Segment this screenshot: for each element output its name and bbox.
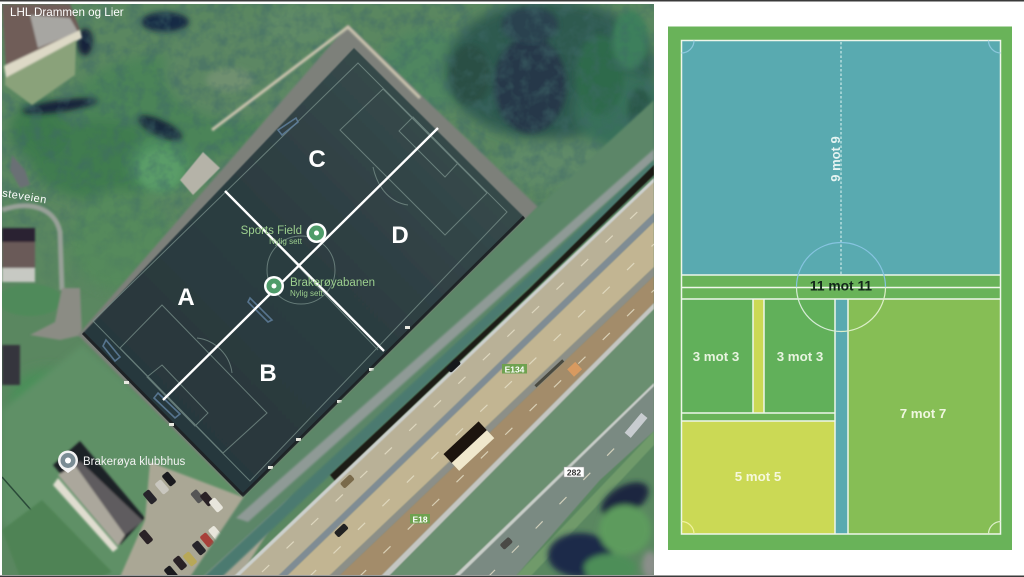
map pin: Sports Field: Nylig sett	[269, 237, 303, 246]
map pin: Brakerøyabanen: Brakerøyabanen	[290, 277, 375, 289]
zone letter B: B	[259, 360, 277, 387]
building top left	[2, 4, 82, 105]
zone: teal strip	[835, 299, 848, 534]
corner arcs	[682, 40, 1000, 534]
gravel surround of the pitch	[78, 25, 538, 498]
lane dashes	[262, 196, 654, 577]
map pin: Sports Field: Sports Field	[241, 225, 302, 237]
zone letter A: A	[177, 284, 195, 311]
label: 11 mot 11: 11 mot 11	[810, 278, 872, 294]
panel: pitch division diagram	[668, 26, 1012, 550]
motorway carriageways	[233, 178, 654, 577]
grass strip, path and hedge	[190, 100, 654, 577]
zone: 9 mot 9: 9 mot 9	[828, 136, 843, 182]
pitch markings	[682, 40, 1000, 534]
zone: 7 mot 7	[848, 299, 1001, 534]
road badge E134: E134	[505, 364, 525, 374]
zone: 9 mot 9	[682, 41, 1000, 275]
map pin: Brakerøya klubbhus: Brakerøya klubbhus	[83, 456, 186, 468]
centre circle	[796, 242, 886, 332]
tree canopy texture	[2, 4, 654, 240]
panel: satellite map of the field	[0, 0, 665, 577]
houses on left edge	[0, 155, 82, 385]
zone letter D: D	[391, 222, 409, 249]
white dividing line two	[225, 191, 384, 351]
zone: 7 mot 7: 7 mot 7	[900, 406, 946, 421]
zone letter C: C	[308, 146, 326, 173]
zones: left 3 mot 3: 3 mot 3	[693, 349, 739, 364]
trees lower right	[548, 475, 658, 577]
map pin: Sports Field	[241, 223, 326, 246]
map pin: Brakerøyabanen	[264, 276, 375, 298]
white dividing line one	[163, 128, 438, 400]
pitch background	[668, 26, 1012, 550]
zone: 5 mot 5	[682, 421, 835, 534]
road badge E18: E18	[412, 514, 428, 524]
map pin: Brakerøyabanen: Nylig sett	[290, 289, 324, 298]
zones: right 3 mot 3: 3 mot 3	[777, 349, 823, 364]
pitch markings	[93, 63, 507, 481]
zone: 5 mot 5: 5 mot 5	[735, 469, 782, 484]
road badge 282	[564, 467, 584, 478]
lawn below field	[5, 352, 234, 573]
pitch surface	[83, 48, 524, 495]
map label: steveien: steveien	[1, 187, 48, 206]
clubhouse and parking	[2, 441, 300, 577]
map label: LHL Drammen og Lier: LHL Drammen og Lier	[10, 6, 124, 19]
map pin: Brakerøya klubbhus	[58, 450, 186, 473]
goals	[103, 118, 298, 418]
vehicles	[334, 358, 647, 550]
trees and vegetation	[7, 4, 654, 399]
zones: left 3 mot 3	[682, 299, 753, 413]
road badge 282: 282	[567, 468, 581, 478]
floodlights	[124, 326, 410, 469]
zones: right 3 mot 3	[764, 299, 835, 413]
zone: yellow strip	[753, 299, 764, 413]
